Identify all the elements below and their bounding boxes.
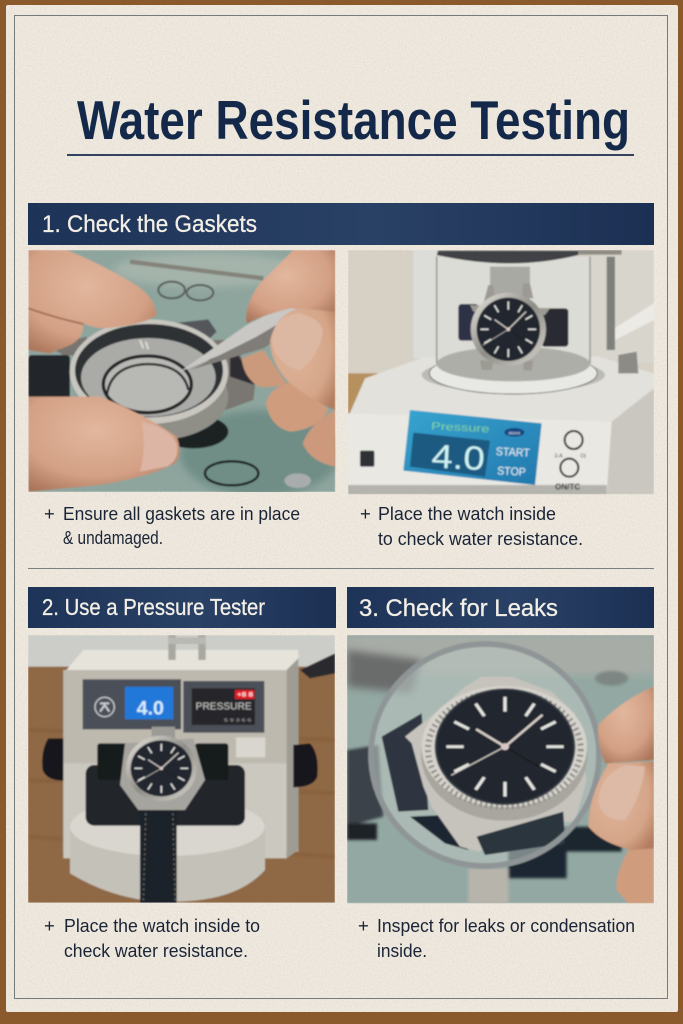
photo: pressure tester with watch under glass dome bbox=[348, 250, 654, 494]
step 2 notes: check water resistance. bbox=[64, 940, 248, 961]
step 3 notes: + bbox=[358, 915, 369, 936]
section bar: step 3 heading bbox=[347, 587, 654, 628]
control buttons: ON/TC bbox=[555, 481, 580, 491]
tester body bbox=[348, 352, 654, 494]
control buttons: 3-A bbox=[554, 453, 563, 459]
step 1 notes: right: + bbox=[360, 503, 371, 524]
step 3 notes: inside. bbox=[377, 940, 427, 961]
tester machine bbox=[63, 635, 298, 858]
display panel: STOP bbox=[497, 465, 526, 479]
right hand bbox=[242, 250, 335, 467]
step 2 notes: + bbox=[44, 915, 55, 936]
tool and rings in background bbox=[130, 262, 263, 300]
display panel: 4.0 bbox=[431, 438, 486, 478]
side knobs bbox=[42, 738, 318, 787]
blurred strap bbox=[347, 745, 622, 903]
loose gasket bbox=[205, 461, 258, 485]
step 1 notes: right: Place the watch inside bbox=[378, 503, 556, 524]
magnifier ring bbox=[371, 644, 599, 866]
round pedestal bbox=[69, 810, 266, 902]
control buttons: O| bbox=[580, 453, 586, 459]
blue digital readout: 4.0 bbox=[137, 698, 164, 719]
photo: bench pressure tester with mounted watch bbox=[28, 635, 335, 903]
step 2 notes bbox=[44, 915, 260, 961]
section bar: step 1 heading: 1. Check the Gaskets bbox=[42, 211, 257, 238]
watch face bbox=[421, 686, 588, 821]
left fingers bbox=[28, 250, 180, 492]
control panel: +8 8 bbox=[237, 692, 253, 699]
glass dome and platform bbox=[437, 250, 622, 381]
control panel bbox=[83, 679, 264, 733]
step 2 notes: Place the watch inside to bbox=[64, 915, 260, 936]
control panel: 5 9 3 6 6 bbox=[224, 717, 252, 723]
step 1 notes: left: + bbox=[44, 503, 55, 524]
control buttons bbox=[554, 431, 586, 491]
pressure label: PRESSURE bbox=[196, 701, 252, 712]
step 1 notes: right bbox=[360, 503, 583, 549]
section bar: step 1 heading bbox=[28, 203, 654, 245]
photo: inspecting watch through magnifier bbox=[347, 635, 654, 903]
display panel bbox=[403, 410, 542, 485]
photo: hands checking gaskets with tweezers bbox=[28, 250, 340, 497]
holding fingers bbox=[588, 687, 654, 903]
watch case open bbox=[28, 319, 255, 448]
step 1 notes: left: & undamaged. bbox=[63, 527, 163, 548]
section bar: step 3 heading: 3. Check for Leaks bbox=[359, 595, 558, 622]
pressure reading: Pressure bbox=[431, 420, 490, 435]
step 1 notes: left: Ensure all gaskets are in place bbox=[63, 503, 300, 524]
tweezers bbox=[182, 308, 297, 371]
loose screw bbox=[284, 473, 311, 488]
step 3 notes: Inspect for leaks or condensation bbox=[377, 915, 635, 936]
mounted watch bbox=[86, 727, 245, 903]
step 3 notes bbox=[358, 915, 635, 961]
display panel: START bbox=[496, 446, 530, 460]
display panel: store bbox=[508, 430, 521, 435]
step 1 notes: left bbox=[44, 503, 300, 548]
magnifier lens interior bbox=[372, 645, 598, 865]
small black switch bbox=[360, 451, 374, 467]
watch in dome bbox=[458, 283, 568, 371]
section bar: step 2 heading: 2. Use a Pressure Tester bbox=[42, 594, 265, 620]
step 1 notes: right: to check water resistance. bbox=[378, 528, 583, 549]
section bar: step 2 heading bbox=[28, 587, 336, 628]
